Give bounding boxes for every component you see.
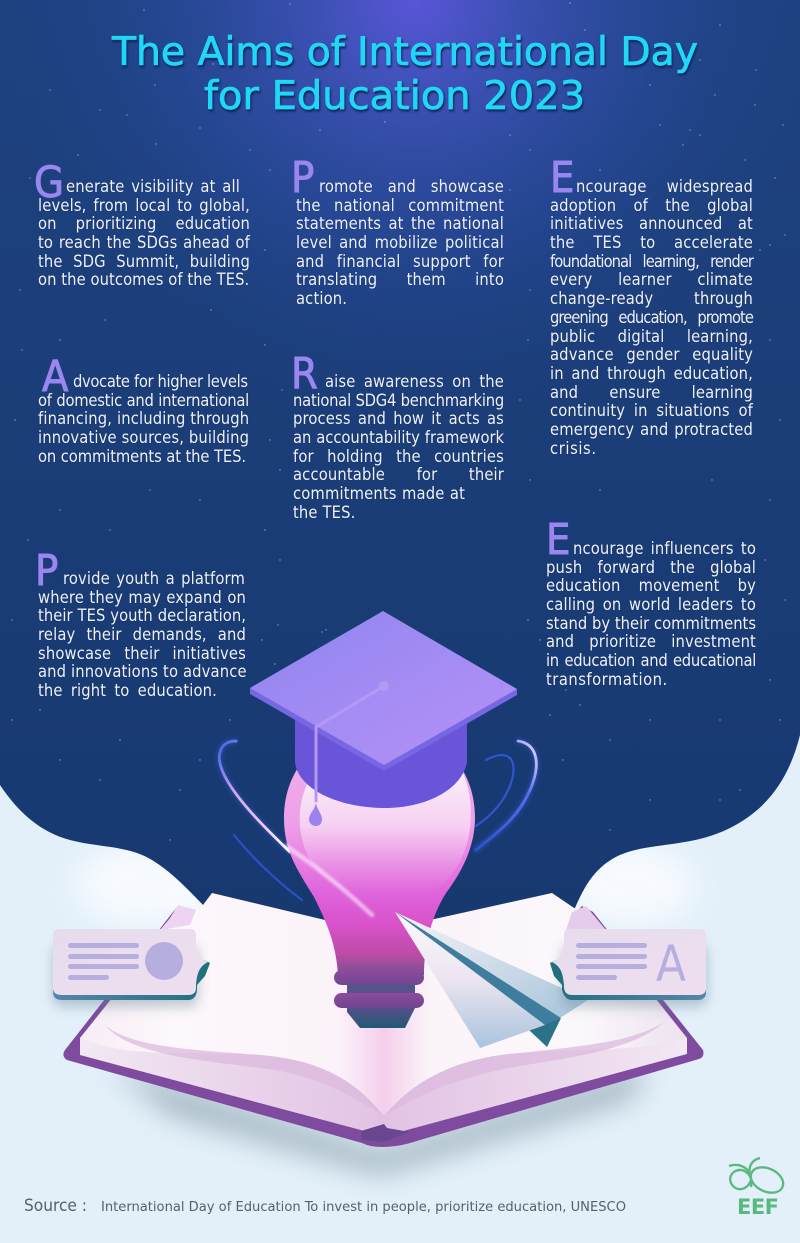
source line — [24, 1196, 626, 1216]
Generate paragraph: levels, from local to global, — [38, 196, 250, 215]
info card right: A — [656, 935, 686, 993]
Encourage influencers paragraph: calling on world leaders to — [546, 595, 756, 614]
text block: Generate — [34, 158, 250, 289]
drop cap P: P — [291, 153, 314, 203]
Promote paragraph: level and mobilize political — [296, 233, 504, 252]
EEF logo — [729, 1158, 787, 1219]
open book — [63, 893, 703, 1175]
Encourage influencers paragraph: transformation. — [546, 670, 668, 689]
book cover — [63, 906, 703, 1147]
Encourage adoption paragraph: change-ready through — [550, 289, 753, 308]
Generate paragraph: to reach the SDGs ahead of — [38, 233, 250, 252]
background: night sky — [0, 0, 800, 970]
Raise paragraph — [293, 372, 504, 522]
Encourage adoption paragraph: continuity in situations of — [550, 401, 753, 420]
Encourage adoption paragraph: foundational learning, render — [550, 252, 753, 271]
graduation cap — [250, 611, 517, 826]
paper plane — [395, 912, 588, 1048]
text block: Advocate — [38, 352, 249, 466]
text block: Encourage influencers — [546, 515, 756, 689]
Provide paragraph: relay their demands, and — [38, 625, 246, 644]
text block: Raise — [291, 349, 504, 522]
bulb streak — [286, 846, 372, 915]
drop cap E: E — [546, 515, 570, 565]
Promote paragraph: romote and showcase — [319, 177, 504, 196]
text block: Promote — [291, 153, 504, 308]
Provide paragraph — [38, 569, 247, 700]
Promote paragraph: the national commitment — [296, 196, 504, 215]
Provide paragraph: the right to education. — [38, 681, 217, 700]
cap board — [250, 611, 517, 765]
cap board edge — [250, 688, 517, 771]
Encourage adoption paragraph: advance gender equality — [550, 345, 753, 364]
drop cap G: G — [34, 158, 64, 208]
left page thickness — [80, 1030, 384, 1133]
info card left — [53, 929, 210, 1007]
Promote paragraph: and financial support for — [296, 252, 504, 271]
left page surface — [80, 893, 384, 1116]
Encourage influencers paragraph: and prioritize investment — [546, 632, 756, 651]
Encourage adoption paragraph: emergency and protracted — [550, 420, 753, 439]
Advocate paragraph: of domestic and international — [38, 391, 249, 410]
cap band — [295, 680, 467, 808]
Raise paragraph: aise awareness on the — [325, 372, 504, 391]
Generate paragraph: the SDG Summit, building — [38, 252, 250, 271]
orbit rings behind bulb — [219, 741, 536, 900]
Promote paragraph: statements at the national — [296, 214, 504, 233]
Encourage adoption paragraph: initiatives announced at — [550, 214, 753, 233]
text block: Encourage adoption — [550, 153, 754, 458]
right page curl — [384, 1022, 665, 1116]
Encourage adoption paragraph: and ensure learning — [550, 383, 753, 402]
bulb glass — [284, 725, 475, 975]
left page curl — [105, 1025, 384, 1116]
right page tab — [566, 906, 606, 930]
Encourage adoption paragraph: adoption of the global — [550, 196, 753, 215]
title — [111, 30, 698, 119]
drop cap E: E — [550, 153, 574, 203]
source line: International Day of Education To invest in people, prioritize education, UNESCO — [101, 1199, 626, 1215]
Raise paragraph: commitments made at — [293, 484, 465, 503]
Advocate paragraph: financing, including through — [38, 409, 249, 428]
left page tab — [160, 905, 196, 930]
Encourage adoption paragraph: every learner climate — [550, 270, 753, 289]
Encourage adoption paragraph: crisis. — [550, 439, 597, 458]
right page surface — [384, 893, 687, 1116]
Provide paragraph: showcase their initiatives — [38, 644, 246, 663]
Encourage influencers paragraph: stand by their commitments — [546, 614, 756, 633]
Advocate paragraph: innovative sources, building — [38, 428, 249, 447]
Raise paragraph: process and how it acts as — [293, 409, 504, 428]
Raise paragraph: the TES. — [293, 503, 355, 522]
Promote paragraph: translating them into — [296, 270, 504, 289]
source line: Source : — [24, 1196, 87, 1216]
Encourage influencers paragraph: ncourage influencers to — [573, 539, 756, 558]
text block: Provide — [35, 546, 247, 700]
drop cap A: A — [42, 352, 68, 402]
Raise paragraph: accountable for their — [293, 465, 504, 484]
stars — [12, 3, 785, 840]
Generate paragraph — [38, 177, 250, 289]
Provide paragraph: where they may expand on — [38, 588, 246, 607]
Encourage adoption paragraph: ncourage widespread — [576, 177, 753, 196]
Encourage influencers paragraph — [546, 539, 756, 689]
drop cap R: R — [291, 349, 318, 399]
Encourage adoption paragraph: public digital learning, — [550, 326, 753, 346]
title: The Aims of International Day — [111, 30, 698, 75]
Encourage influencers paragraph: in education and educational — [546, 651, 756, 670]
book shadow — [110, 1065, 650, 1175]
bulb screw base — [334, 970, 424, 1028]
Provide paragraph: and innovations to advance — [38, 662, 247, 681]
tassel — [309, 681, 389, 826]
drop cap P: P — [35, 546, 58, 596]
Encourage influencers paragraph: education movement by — [546, 576, 756, 595]
Provide paragraph: their TES youth declaration, — [38, 606, 246, 625]
Provide paragraph: rovide youth a platform — [63, 569, 245, 588]
EEF logo: EEF — [737, 1195, 779, 1219]
Advocate paragraph: on commitments at the TES. — [38, 447, 246, 466]
Generate paragraph: enerate visibility at all — [66, 177, 240, 196]
Generate paragraph: on the outcomes of the TES. — [38, 270, 249, 289]
Raise paragraph: an accountability framework — [293, 428, 504, 447]
Promote paragraph — [296, 177, 504, 308]
Encourage adoption paragraph — [550, 177, 754, 458]
Encourage adoption paragraph: greening education, promote — [550, 308, 753, 327]
light bulb — [284, 725, 475, 1028]
Raise paragraph: for holding the countries — [293, 447, 504, 466]
Advocate paragraph — [38, 372, 249, 466]
light lower background with wave — [0, 735, 800, 970]
spine — [361, 1124, 410, 1142]
Generate paragraph: on prioritizing education — [38, 214, 250, 233]
Encourage influencers paragraph: push forward the global — [546, 558, 756, 577]
right page thickness — [384, 1030, 687, 1133]
Encourage adoption paragraph: in and through education, — [550, 364, 753, 383]
Encourage adoption paragraph: the TES to accelerate — [550, 233, 753, 252]
Promote paragraph: action. — [296, 289, 347, 308]
bulb highlight — [300, 770, 471, 900]
Advocate paragraph: dvocate for higher levels — [73, 372, 248, 391]
title: for Education 2023 — [204, 74, 585, 119]
info card right — [550, 929, 707, 1007]
Raise paragraph: national SDG4 benchmarking — [293, 391, 504, 410]
